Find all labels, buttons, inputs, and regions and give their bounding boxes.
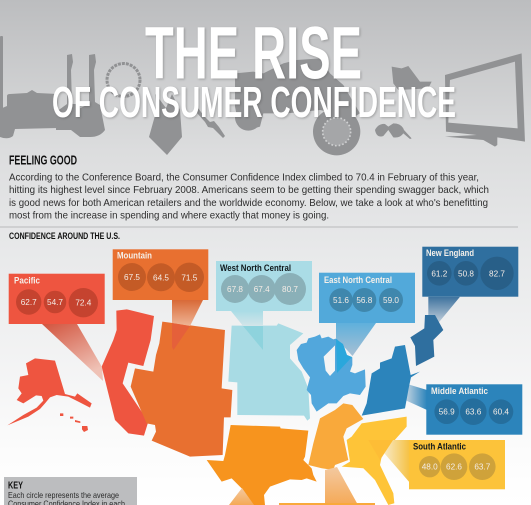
label: East North Central: East North Central bbox=[324, 275, 392, 285]
panel: East North Central: 56.8 bbox=[356, 296, 373, 305]
map: West South Central states bbox=[207, 425, 317, 505]
map: East North Central states bbox=[297, 334, 366, 412]
map: East South Central states bbox=[308, 403, 363, 470]
panel: New England: 50.8 bbox=[458, 269, 474, 278]
icon: beaded necklace bbox=[107, 64, 140, 96]
panel: East South Central, top edge bbox=[279, 503, 375, 505]
label: Mountain: Mountain bbox=[117, 250, 152, 260]
intro paragraph: is good news for both American retailers and the worldwide economy. Below, we take a look at who's benefitting bbox=[9, 198, 488, 209]
panel: South Atlantic bbox=[409, 440, 505, 489]
panel: East North Central: 51.6 bbox=[333, 296, 349, 305]
panel: Mountain: 67.5 bbox=[124, 273, 140, 282]
panel: New England: 61.2 bbox=[431, 269, 448, 278]
label: Middle Atlantic: Middle Atlantic bbox=[431, 386, 488, 396]
pointer: East South Central bbox=[325, 467, 358, 505]
label: West North Central: West North Central bbox=[220, 263, 291, 273]
intro paragraph: According to the Conference Board, the Consumer Confidence Index climbed to 70.4 in February of this year, bbox=[9, 173, 479, 184]
panel: Pacific: 72.4 bbox=[75, 299, 92, 308]
map: Mountain states bbox=[131, 322, 232, 457]
panel: South Atlantic: 48.0 bbox=[422, 463, 438, 472]
title bbox=[52, 12, 456, 127]
icon: keys bbox=[197, 108, 225, 138]
callout pointers bbox=[42, 300, 409, 505]
map: South Atlantic states bbox=[342, 417, 407, 505]
intro section bbox=[9, 153, 489, 221]
key description bbox=[8, 490, 125, 505]
icon: high-top sneaker bbox=[392, 66, 432, 90]
pointer: West North Central bbox=[231, 311, 263, 326]
label: Pacific: Pacific bbox=[14, 276, 40, 286]
callout pointer: Middle Atlantic bbox=[405, 384, 427, 410]
panel: East North Central: 59.0 bbox=[383, 296, 399, 305]
panel: Pacific bbox=[9, 274, 105, 324]
icon: swimsuit bbox=[149, 94, 182, 155]
Washington, Oregon, California bbox=[102, 309, 154, 436]
pointer: South Atlantic bbox=[384, 440, 409, 482]
intro paragraph bbox=[9, 173, 489, 221]
panel: New England: 82.7 bbox=[489, 269, 505, 278]
icon: motorcycle rear wheel bbox=[313, 108, 360, 155]
icon: flat screen television bbox=[445, 53, 525, 147]
panel: West North Central bbox=[216, 261, 312, 311]
Hawaii bbox=[60, 413, 88, 432]
panel: Pacific: 54.7 bbox=[47, 298, 63, 307]
panel: South Atlantic: 63.7 bbox=[474, 463, 491, 472]
panel: West North Central: 80.7 bbox=[282, 285, 298, 294]
pointer: West South Central bbox=[229, 488, 254, 505]
panel: Middle Atlantic: 63.6 bbox=[465, 408, 482, 417]
panel: New England bbox=[422, 247, 518, 297]
key description: Each circle represents the average bbox=[8, 490, 119, 500]
panel: South Atlantic: 62.6 bbox=[446, 463, 462, 472]
pointer overlap on South Atlantic states bbox=[368, 440, 393, 460]
map: Middle Atlantic states bbox=[362, 345, 420, 416]
map: Pacific states bbox=[7, 309, 154, 436]
icon: travel bag bbox=[0, 90, 58, 138]
panel: Middle Atlantic: 60.4 bbox=[493, 408, 509, 417]
pointer: Pacific bbox=[42, 324, 103, 381]
icon: aviator sunglasses bbox=[375, 123, 412, 139]
pointer overlap on Mountain states bbox=[172, 323, 190, 350]
intro paragraph: most from the increase in spending and where exactly that money is going. bbox=[9, 210, 329, 221]
panel: Mountain: 71.5 bbox=[181, 273, 198, 282]
section heading: confidence around the U.S.: CONFIDENCE AROUND THE U.S. bbox=[9, 231, 120, 241]
panel: Mountain bbox=[113, 249, 208, 300]
icon: guitar neck at left edge bbox=[0, 36, 3, 110]
label: New England: New England bbox=[426, 248, 474, 258]
pointer: East North Central bbox=[336, 323, 376, 356]
heading: feeling good: FEELING GOOD bbox=[9, 153, 77, 167]
panel: Middle Atlantic: 56.9 bbox=[439, 408, 455, 417]
callout pointer: New England bbox=[428, 297, 460, 323]
map: West North Central states bbox=[228, 323, 310, 421]
pointer overlap on West North Central states bbox=[243, 326, 263, 350]
key heading: KEY bbox=[8, 480, 23, 492]
key panel bbox=[4, 477, 137, 505]
icon: right guitar bbox=[56, 54, 105, 137]
header silhouettes of consumer goods bbox=[0, 36, 525, 155]
pointer overlap on Michigan bbox=[336, 339, 352, 373]
panel: Pacific: 62.7 bbox=[21, 298, 37, 307]
panel: Mountain: 64.5 bbox=[153, 273, 169, 282]
label: South Atlantic: South Atlantic bbox=[413, 442, 466, 452]
panel: West North Central: 67.4 bbox=[254, 285, 270, 294]
panel: Middle Atlantic bbox=[426, 384, 522, 435]
panel: West North Central: 67.8 bbox=[227, 285, 243, 294]
Alaska bbox=[7, 358, 92, 425]
map: New England states bbox=[410, 315, 443, 366]
icon: left guitar bbox=[56, 54, 80, 130]
pointer: Mountain bbox=[172, 300, 203, 326]
intro paragraph: hitting its highest level since February 2008. Americans seem to be getting their spending swagger back, which bbox=[9, 185, 489, 196]
title line 1: THE RISE bbox=[145, 12, 362, 94]
panel: East North Central bbox=[319, 273, 415, 323]
icon: motorcycle bbox=[235, 58, 360, 155]
